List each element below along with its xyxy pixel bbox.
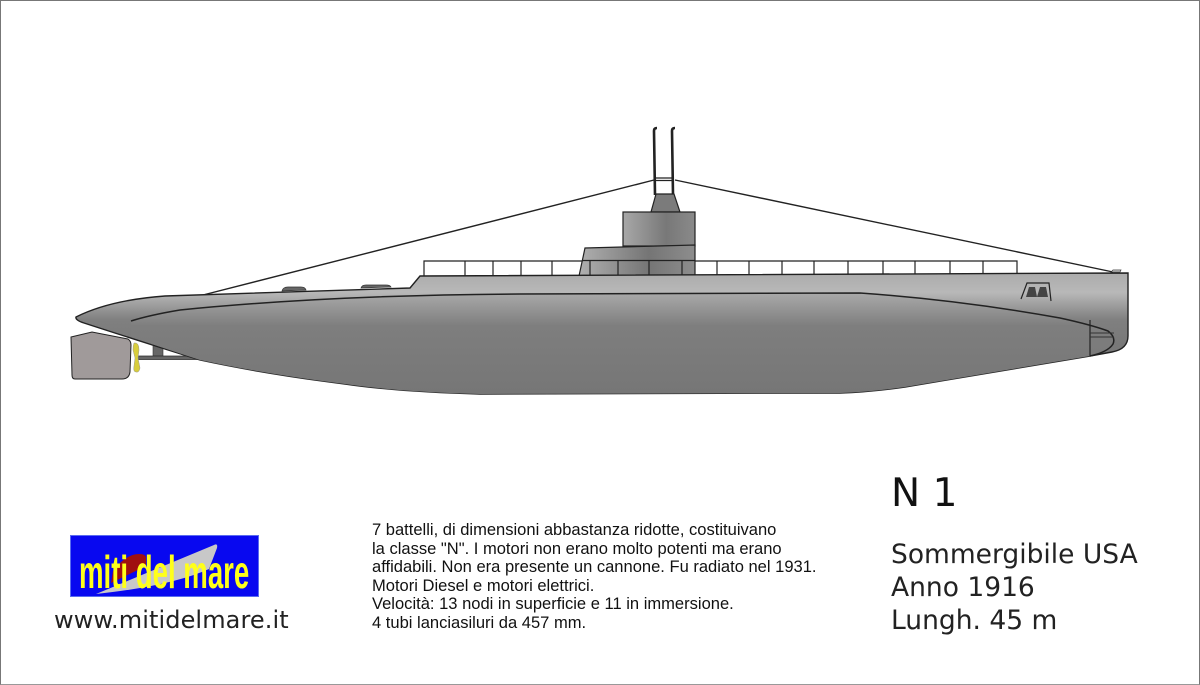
hull [76,273,1128,394]
propeller shaft [138,345,203,360]
deck railing [424,261,1017,276]
conning tower [579,194,695,276]
periscopes [654,128,675,195]
description text: affidabili. Non era presente un cannone. Fu radiato nel 1931. [372,557,817,576]
rudder [71,332,131,379]
description text: 7 battelli, di dimensioni abbastanza ridotte, costituivano [372,520,776,539]
specifications: Anno 1916 [891,572,1035,603]
specifications [891,539,1138,636]
logo: miti del mare: miti del mare [79,546,249,597]
description text: Motori Diesel e motori elettrici. [372,576,594,595]
rigging wires [203,180,1113,295]
deck hatches [282,270,1121,291]
hawse window [1021,283,1051,301]
website url: www.mitidelmare.it [54,606,289,634]
specifications: Lungh. 45 m [891,605,1057,636]
propeller [133,343,140,372]
description text [372,520,817,632]
description text: la classe "N". I motori non erano molto potenti ma erano [372,539,782,558]
title: N 1 [891,471,957,516]
description text: 4 tubi lanciasiluri da 457 mm. [372,613,586,632]
description text: Velocità: 13 nodi in superficie e 11 in immersione. [372,594,734,613]
specifications: Sommergibile USA [891,539,1138,570]
